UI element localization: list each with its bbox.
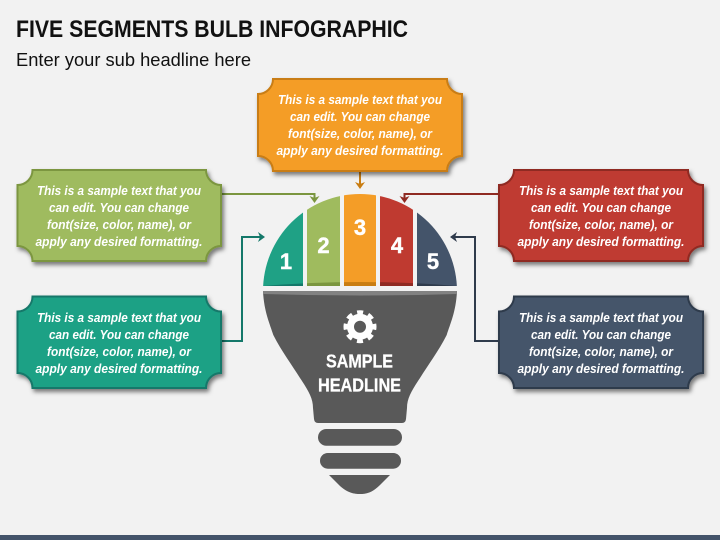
bulb headline: HEADLINE: [318, 374, 401, 396]
segment 2: [307, 190, 340, 286]
text: red box copy: [518, 183, 684, 249]
text: green box copy: [36, 183, 202, 249]
bulb base thread 1: [318, 429, 402, 446]
text: teal box copy: apply any desired formatting.: [36, 361, 202, 376]
text: green box copy: font(size, color, name), or: [47, 217, 192, 232]
text: orange box copy: This is a sample text that you: [278, 92, 442, 107]
bulb dome segments: [263, 190, 457, 286]
connector: box 4 to segment 4: [400, 194, 499, 203]
panel: red text box: [499, 170, 703, 261]
text: orange box copy: [276, 92, 444, 158]
segment 5: [417, 212, 457, 286]
text: red box copy: font(size, color, name), or: [529, 217, 674, 232]
text: navy box copy: This is a sample text that you: [519, 310, 683, 325]
text: green box copy: can edit. You can change: [49, 200, 189, 215]
text: orange box copy: font(size, color, name), or: [288, 126, 433, 141]
segment 1: [263, 212, 303, 286]
text: navy box copy: font(size, color, name), or: [529, 344, 674, 359]
bulb body: [263, 291, 457, 423]
text: green box copy: apply any desired formatting.: [36, 234, 202, 249]
panel: teal text box: [18, 296, 221, 388]
text: navy box copy: apply any desired formatting.: [518, 361, 684, 376]
footer bar: [0, 535, 720, 540]
icon: gear: [346, 312, 374, 341]
segment 4: [380, 190, 413, 286]
subtitle: Enter your sub headline here: [16, 50, 251, 70]
segment 3: [344, 190, 376, 286]
text: orange box copy: can edit. You can change: [290, 109, 430, 124]
text: red box copy: can edit. You can change: [531, 200, 671, 215]
panel: green text box: [18, 170, 221, 261]
connector: box 5 to segment 5: [450, 232, 499, 341]
segment 3: 3: [354, 215, 366, 240]
bulb headline: [318, 350, 401, 396]
text: navy box copy: [518, 310, 684, 376]
connector: box 1 to segment 1: [221, 232, 265, 341]
panel: navy text box: [499, 296, 703, 388]
title: FIVE SEGMENTS BULB INFOGRAPHIC: [16, 16, 408, 43]
text: navy box copy: can edit. You can change: [531, 327, 671, 342]
segment 1: 1: [280, 249, 292, 274]
text: orange box copy: apply any desired formatting.: [276, 143, 444, 158]
connector: box 2 to segment 2: [221, 194, 320, 203]
connector: box 3 to segment 3: [355, 171, 365, 189]
text: green box copy: This is a sample text that you: [37, 183, 201, 198]
text: red box copy: apply any desired formatting.: [518, 234, 684, 249]
bulb tip: [329, 475, 390, 494]
bulb base thread 2: [320, 453, 401, 469]
text: teal box copy: can edit. You can change: [49, 327, 189, 342]
text: teal box copy: This is a sample text that you: [37, 310, 201, 325]
segment 2: 2: [317, 233, 330, 258]
text: red box copy: This is a sample text that you: [519, 183, 683, 198]
bulb headline: SAMPLE: [326, 350, 393, 372]
panel: top orange text box: [258, 79, 462, 171]
text: teal box copy: font(size, color, name), or: [47, 344, 192, 359]
text: teal box copy: [36, 310, 202, 376]
segment 4: 4: [391, 233, 404, 258]
segment 5: 5: [427, 249, 439, 274]
